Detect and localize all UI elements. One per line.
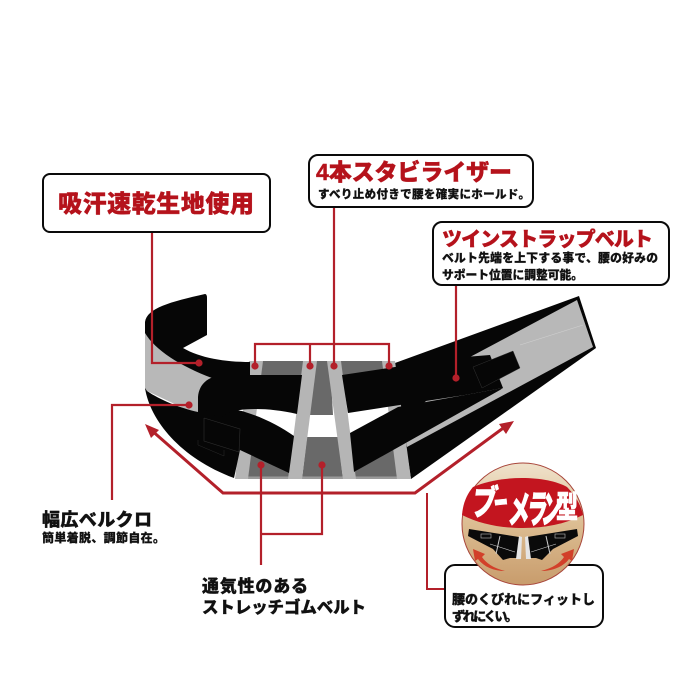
callout: fits waist	[445, 565, 603, 627]
label: breathable stretch rubber belt: ストレッチゴムベルト	[202, 597, 366, 617]
badge title: ー	[492, 487, 510, 520]
label: breathable stretch rubber belt: 通気性のある	[202, 576, 308, 596]
leader: twin strap	[454, 284, 458, 380]
red arrows	[473, 549, 505, 571]
callout: twin strap belt: ベルト先端を上下する事で、腰の好みの	[442, 251, 658, 265]
velcro tab right	[473, 351, 520, 388]
boomerang badge	[462, 463, 584, 585]
leader: four stabilizers	[252, 206, 392, 368]
label: wide velcro: 簡単着脱、調節自在。	[42, 530, 165, 545]
right belt wing	[395, 296, 596, 479]
callout: four stabilizers	[309, 155, 533, 207]
callout: twin strap belt: ツインストラップベルト	[442, 228, 653, 251]
badge title: ン	[540, 487, 563, 532]
badge title: 型	[556, 490, 578, 525]
callout: quick-dry fabric: 吸汗速乾生地使用	[58, 191, 254, 218]
leader: quick-dry fabric	[152, 232, 202, 366]
left belt wing	[145, 294, 250, 478]
badge title: メ	[506, 489, 532, 532]
belt illustration	[145, 294, 596, 479]
callout: fits waist: ずれにくい。	[452, 609, 518, 624]
twin straps	[198, 355, 503, 473]
badge title: ラ	[525, 488, 550, 532]
callout: four stabilizers: 4本スタビライザー	[316, 159, 512, 185]
wide red arrow under belt	[145, 421, 514, 493]
badge title	[470, 483, 578, 532]
stabilizers	[235, 361, 411, 479]
callout: fits waist: 腰のくびれにフィットし	[452, 592, 595, 607]
red band	[462, 478, 583, 528]
label: wide velcro: 幅広ベルクロ	[42, 510, 152, 530]
velcro tab left	[198, 405, 240, 457]
callout: four stabilizers: すべり止め付きで腰を確実にホールド。	[318, 187, 530, 201]
leader: wide velcro	[112, 402, 192, 500]
leader: boomerang	[427, 493, 446, 589]
callout: twin strap belt: サポート位置に調整可能。	[442, 268, 583, 282]
mini belt	[468, 529, 578, 560]
leader: stretch rubber belt	[258, 462, 324, 565]
badge title: ブ	[470, 483, 500, 523]
center mesh panels	[246, 361, 401, 479]
callout: quick-dry fabric	[43, 174, 270, 232]
label: breathable stretch rubber belt	[202, 576, 366, 617]
label: wide velcro	[42, 510, 165, 545]
callout: twin strap belt	[433, 222, 669, 285]
